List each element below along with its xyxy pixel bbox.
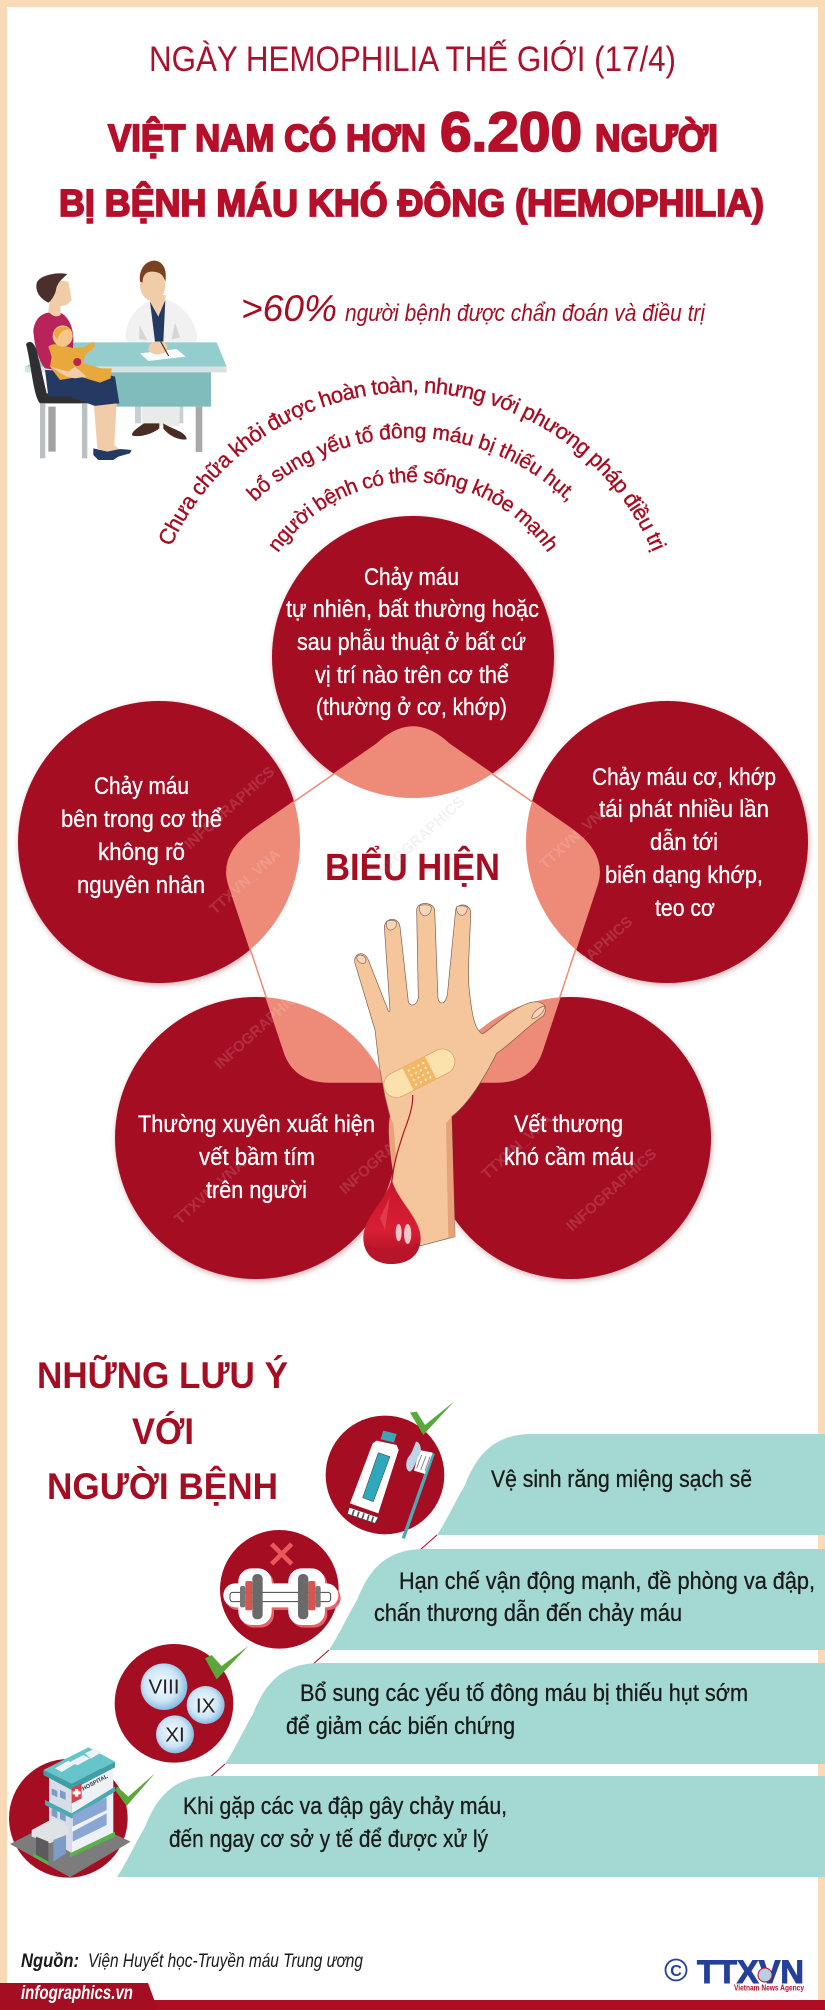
icon: clotting factors VIII IX XI	[115, 1644, 248, 1763]
logo: TTXVN: C	[670, 1963, 682, 1980]
heading: symptoms: BIỂU HIỆN	[325, 844, 500, 889]
note bar: go to a medical facility: Khi gặp các va đập gây chảy máu,	[183, 1793, 507, 1820]
note bar: limit strenuous activity	[312, 1549, 825, 1665]
stat: 60 percent diagnosed and treated	[241, 288, 706, 329]
infographic canvas: INFOGRAPHICS	[336, 1108, 433, 1198]
stat: 60 percent diagnosed and treated: người bệnh được chẩn đoán và điều trị	[345, 300, 706, 327]
footer band	[0, 1983, 825, 2010]
note bar: oral hygiene	[420, 1434, 825, 1550]
icon: bleeding hand with bandage	[355, 903, 546, 1264]
curved statement text: người bệnh có thể sống khỏe mạnh	[270, 465, 556, 552]
circle: recurrent joint bleeding: Chảy máu cơ, khớp	[592, 764, 776, 791]
infographic canvas: TTXVN_VNA	[206, 846, 284, 918]
heading: notes for patients: NHỮNG LƯU Ý	[37, 1354, 288, 1396]
title: NGƯỜI	[595, 116, 718, 160]
infographic canvas: TTXVN_VNA	[171, 1156, 249, 1228]
circle: wounds hard to stop bleeding	[429, 997, 711, 1279]
note bar: limit strenuous activity: chấn thương dẫn đến chảy máu	[374, 1600, 682, 1627]
heading: notes for patients	[37, 1354, 288, 1507]
icon: clotting factors VIII IX XI: IX	[196, 1694, 216, 1717]
icon: dumbbell crossed	[220, 1530, 341, 1649]
icon: toothpaste and toothbrush	[326, 1402, 454, 1538]
circle: bruises: vết bầm tím	[199, 1144, 315, 1171]
stat: 60 percent diagnosed and treated: >60%	[241, 288, 337, 329]
curved statement text: bổ sung yếu tố đông máu bị thiếu hụt,	[245, 422, 572, 502]
infographic canvas: INFOGRAPHICS	[211, 983, 308, 1073]
circle: recurrent joint bleeding: tái phát nhiều lần	[599, 796, 769, 823]
circle: internal bleeding: bên trong cơ thể	[61, 806, 222, 833]
circle: spontaneous bleeding: (thường ở cơ, khớp)	[316, 694, 507, 721]
heading: notes for patients: NGƯỜI BỆNH	[47, 1465, 278, 1507]
icon: hospital building	[9, 1747, 155, 1878]
infographic canvas: INFOGRAPHICS	[181, 763, 278, 853]
icon: clotting factors VIII IX XI: XI	[165, 1724, 185, 1747]
logo: TTXVN: Vietnam News Agency	[734, 1984, 804, 1992]
circle: spontaneous bleeding: sau phẫu thuật ở bất cứ	[297, 629, 526, 656]
infographic canvas: INFOGRAPHICS	[539, 913, 636, 1003]
circle: internal bleeding	[18, 701, 300, 983]
infographic canvas: TTXVN_VNA	[478, 1111, 556, 1183]
source line: Viện Huyết học-Truyền máu Trung ương	[88, 1951, 363, 1972]
infographic canvas: INFOGRAPHICS	[563, 1145, 660, 1235]
circle: recurrent joint bleeding: teo cơ	[655, 895, 715, 922]
circle: spontaneous bleeding: vị trí nào trên cơ thể	[315, 662, 509, 689]
circle: recurrent joint bleeding: biến dạng khớp,	[605, 862, 763, 889]
circle: bruises: Thường xuyên xuất hiện	[138, 1111, 375, 1138]
infographic canvas: TTXVN_VNA	[536, 801, 614, 873]
circle: spontaneous bleeding: Chảy máu	[364, 564, 459, 591]
circle: bruises: trên người	[206, 1177, 307, 1204]
source line: Nguồn:	[21, 1951, 79, 1972]
circle: wounds hard to stop bleeding: Vết thương	[514, 1111, 623, 1138]
circle: recurrent joint bleeding: dẫn tới	[650, 829, 718, 856]
circle: bruises	[115, 997, 397, 1279]
note bar: supplement clotting factors	[208, 1663, 825, 1779]
title: BỊ BỆNH MÁU KHÓ ĐÔNG (HEMOPHILIA)	[59, 180, 764, 225]
icon: hospital building: HOSPITAL	[81, 1774, 110, 1792]
subtitle: world hemophilia day: NGÀY HEMOPHILIA THẾ GIỚI (17/4)	[149, 39, 676, 79]
title: VIỆT NAM CÓ HƠN	[108, 116, 426, 160]
note bar: supplement clotting factors: Bổ sung các yếu tố đông máu bị thiếu hụt sớm	[300, 1680, 748, 1707]
illustration: mother and child with doctor	[25, 261, 227, 460]
circle: spontaneous bleeding: tự nhiên, bất thường hoặc	[286, 596, 539, 623]
heading: notes for patients: VỚI	[132, 1410, 194, 1452]
source line	[21, 1951, 363, 1972]
curved statement text: Chưa chữa khỏi được hoàn toàn, nhưng với phương pháp điều trị	[160, 376, 667, 553]
circle: internal bleeding: Chảy máu	[94, 773, 189, 800]
note bar: supplement clotting factors: để giảm các biến chứng	[286, 1713, 515, 1740]
icon: clotting factors VIII IX XI: VIII	[148, 1675, 179, 1698]
footer band: infographics.vn	[21, 1983, 133, 2004]
circle: internal bleeding: nguyên nhân	[77, 872, 205, 899]
circle: recurrent joint bleeding	[526, 701, 808, 983]
note bar: go to a medical facility: đến ngay cơ sở y tế để được xử lý	[169, 1826, 488, 1853]
note bar: oral hygiene: Vệ sinh răng miệng sạch sẽ	[491, 1466, 752, 1493]
logo: TTXVN: TTXVN	[697, 1954, 804, 1990]
title	[59, 100, 764, 225]
central pentagon with overlaps	[226, 726, 600, 1083]
title: 6.200	[440, 100, 582, 163]
note bar: go to a medical facility	[117, 1776, 825, 1877]
circle: spontaneous bleeding	[272, 516, 554, 798]
circle: internal bleeding: không rõ	[98, 839, 185, 866]
infographic canvas: INFOGRAPHICS	[371, 793, 468, 883]
circle: wounds hard to stop bleeding: khó cầm máu	[504, 1144, 634, 1171]
